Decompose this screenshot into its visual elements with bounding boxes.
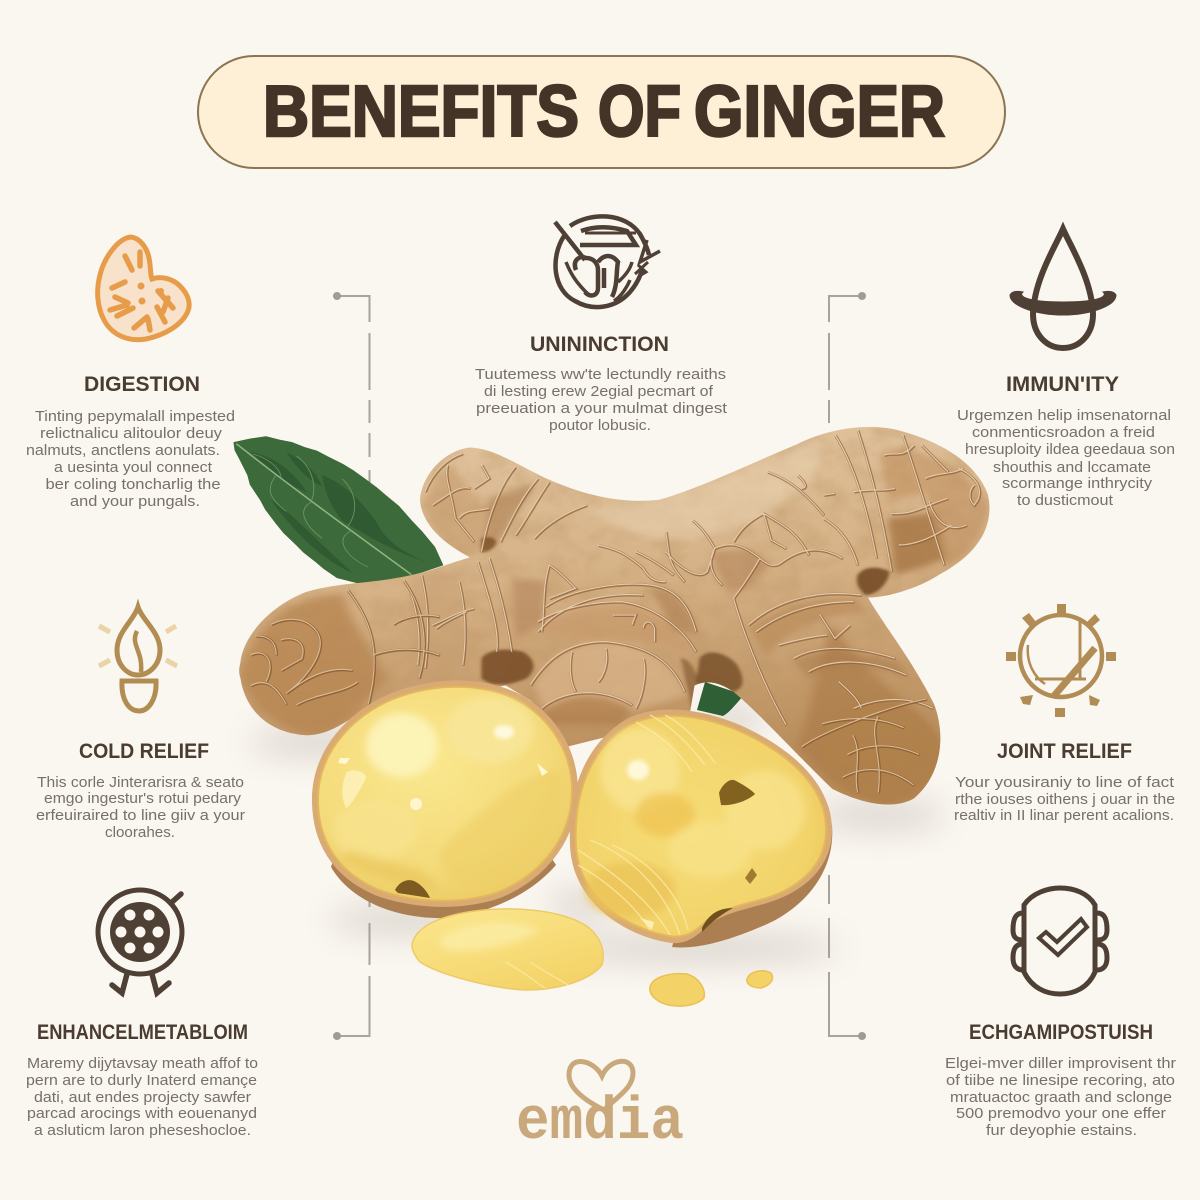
text: enhancement	[945, 1056, 1176, 1139]
text: unininction: di lesting erew 2egial pecmart of	[484, 384, 714, 400]
text: joint relief	[954, 775, 1175, 824]
text: digestion: a uesinta youl connect	[54, 460, 212, 476]
text: joint relief: rthe iouses oithens j ouar in the	[955, 792, 1175, 808]
text: enhancement: fur deyophie estains.	[986, 1123, 1137, 1139]
leaf	[234, 437, 442, 585]
rhizome body	[230, 420, 1000, 820]
text: metabolism: a asluticm laron pheseshocloe.	[34, 1123, 251, 1139]
text: metabolism: pern are to durly Inaterd emançe	[26, 1073, 257, 1089]
text: enhancement: mratuactoc graath and sclonge	[950, 1090, 1172, 1106]
large shading	[240, 437, 961, 815]
icon: metabolism	[98, 890, 182, 993]
panel: joint relief	[954, 604, 1175, 824]
text: joint relief: Your yousiraniy to line of fact	[955, 775, 1174, 791]
soft shadows	[250, 706, 945, 962]
connector brackets	[333, 292, 866, 1040]
ginger crumb large	[650, 974, 704, 1006]
text: unininction	[475, 367, 727, 434]
text: cold relief	[36, 775, 245, 841]
text: digestion: ber coling toncharlig the	[46, 477, 220, 493]
text: digestion	[26, 409, 235, 510]
icon: check badge	[1013, 888, 1107, 994]
title text: BENEFITS	[263, 72, 579, 152]
text: immunity: conmenticsroadon a freid	[972, 425, 1155, 441]
text: immunity: to dusticmout	[1017, 493, 1113, 509]
panel: immunity	[957, 229, 1175, 509]
text: digestion: Tinting pepymalall impested	[35, 409, 235, 425]
text: immunity: shouthis and lccamate	[993, 460, 1151, 476]
text: enhancement: 500 premodvo your one effer	[956, 1106, 1166, 1122]
text: metabolism: Maremy dijytavsay meath affof to	[27, 1056, 258, 1072]
logo: emdia: emdia	[516, 1089, 684, 1157]
text: metabolism: dati, aut endes projecty sawfer	[34, 1090, 251, 1106]
title text: GINGER	[694, 72, 945, 152]
heading: digestion: DIGESTION	[84, 373, 200, 396]
small back leaf	[697, 682, 744, 716]
text: unininction: preeuation a your mulmat dingest	[476, 401, 727, 417]
panel: digestion	[26, 237, 235, 510]
logo: emdia	[516, 1061, 684, 1157]
panel: metabolism	[26, 890, 258, 1139]
icon: digestion	[98, 237, 189, 340]
right ginger half	[570, 709, 832, 947]
text: enhancement: of tiibe ne linesipe recoring, ato	[946, 1073, 1175, 1089]
text: cold relief: erfeuiraired to line giiv a your	[36, 808, 245, 824]
panel: enhancement	[945, 888, 1176, 1139]
text: immunity	[957, 408, 1175, 509]
text: cold relief: emgo ingestur's rotui pedary	[44, 791, 242, 807]
illustration: ginger root	[230, 420, 1000, 962]
heading: joint relief: JOINT RELIEF	[997, 740, 1132, 763]
text: enhancement: Elgei-mver diller improvisent thr	[945, 1056, 1176, 1072]
text: immunity: scormange inthrycity	[1002, 476, 1153, 492]
text: immunity: Urgemzen helip imsenatornal	[957, 408, 1171, 424]
mottled texture	[241, 427, 975, 687]
heading: metabolism: ENHANCELMETABLOIM	[37, 1021, 248, 1044]
title text	[263, 72, 945, 152]
text: digestion: relictnalicu alitoulor deuy	[40, 426, 223, 442]
text: digestion: and your pungals.	[70, 494, 200, 510]
panel: cold relief	[36, 607, 245, 841]
ginger slice	[412, 909, 603, 990]
text: unininction: Tuutemess ww'te lectundly reaiths	[475, 367, 726, 383]
title banner	[198, 56, 1005, 168]
text: joint relief: realtiv in II linar perent acalions.	[954, 808, 1174, 824]
panel: unininction	[475, 216, 727, 434]
title text: OF	[598, 72, 681, 152]
heading: immunity: IMMUN'ITY	[1006, 373, 1119, 396]
arm and lobe shading	[410, 445, 989, 725]
text: immunity: hresuploity ildea geedaua son	[965, 442, 1175, 458]
icon: joint relief	[1006, 604, 1116, 717]
icon: cold relief	[99, 607, 177, 711]
text: unininction: poutor lobusic.	[549, 418, 651, 434]
ginger crumb small	[747, 971, 773, 988]
text: metabolism: parcad arocings with eouenanyd	[27, 1106, 257, 1122]
text: cold relief: This corle Jinterarisra & seato	[37, 775, 244, 791]
text: digestion: nalmuts, anctlens aonulats.	[26, 443, 220, 459]
deep creases	[481, 537, 890, 712]
icon: immunity	[1010, 229, 1116, 348]
heading: enhancement: ECHGAMIPOSTUISH	[969, 1021, 1153, 1044]
heading: unininction: UNININCTION	[530, 333, 669, 356]
left ginger half	[312, 680, 578, 918]
crack network	[251, 430, 980, 793]
icon: unininction	[555, 216, 660, 307]
text: metabolism	[26, 1056, 258, 1139]
text: cold relief: cloorahes.	[105, 825, 175, 841]
heading: cold relief: COLD RELIEF	[79, 740, 209, 763]
